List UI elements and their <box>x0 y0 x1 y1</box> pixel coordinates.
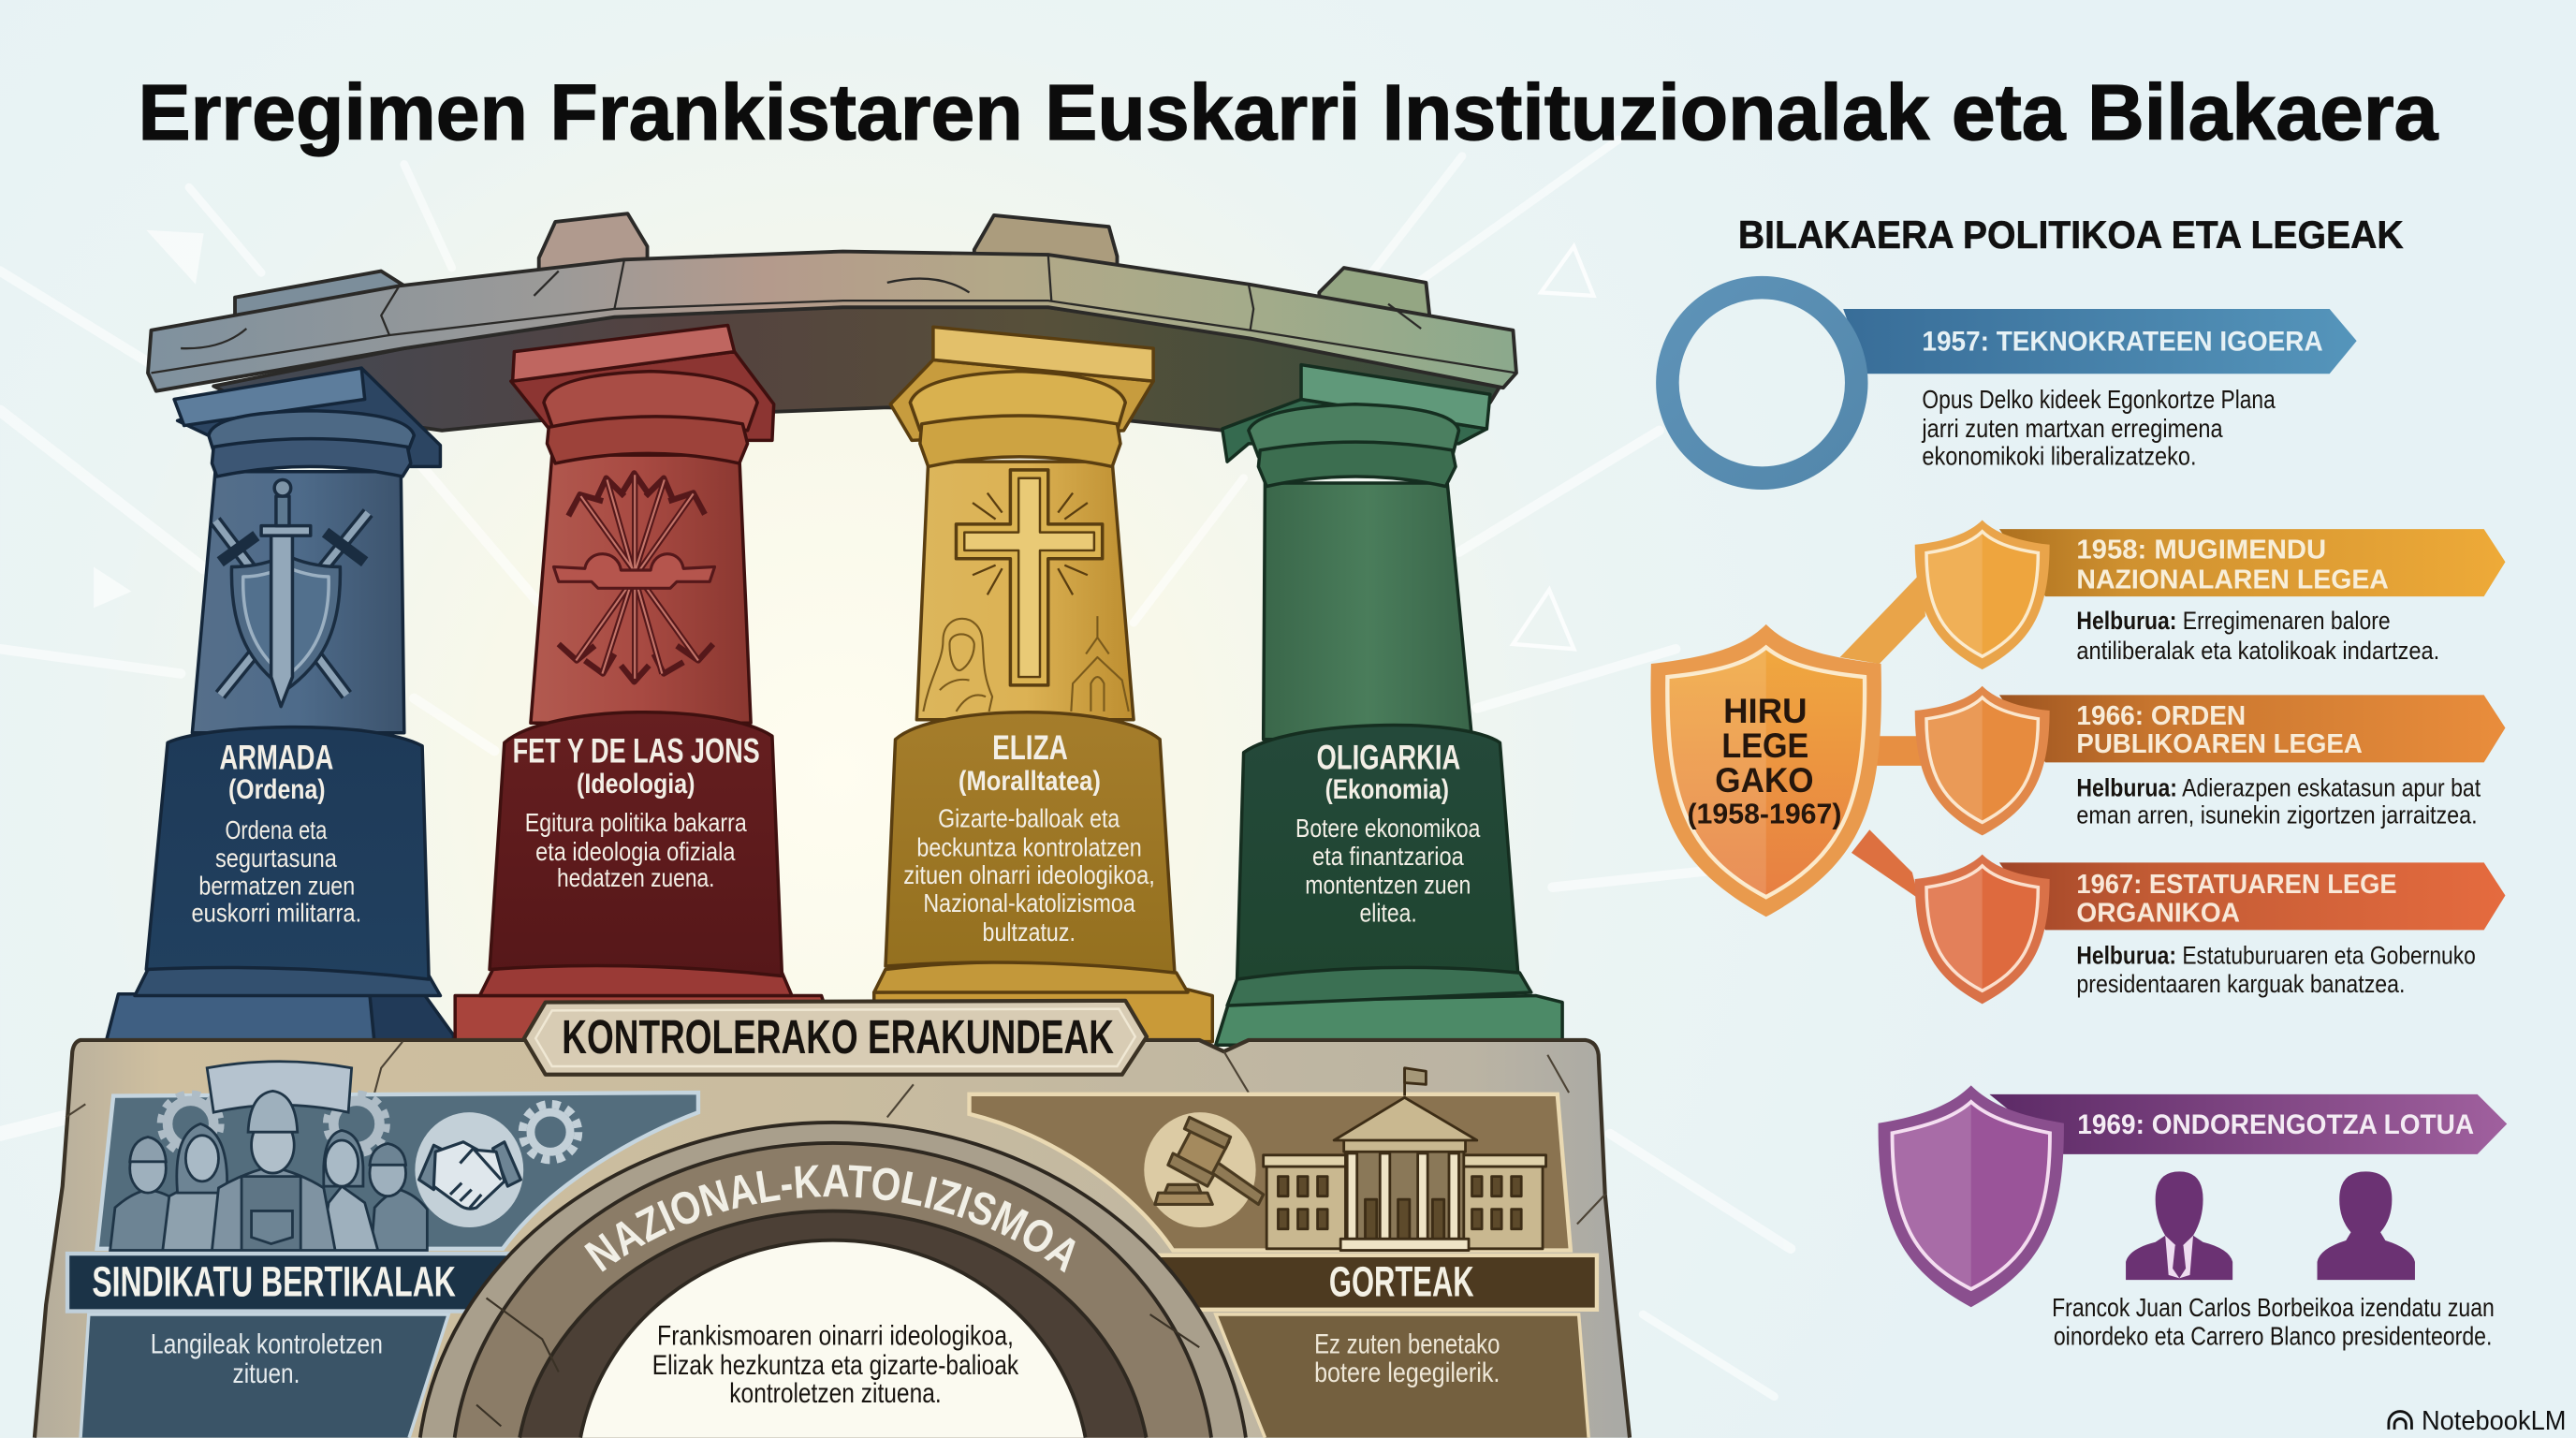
arch: NAZIONAL-KATOLIZISMOA <box>584 1165 1076 1273</box>
arch description: Elizak hezkuntza eta gizarte-balioak <box>652 1350 1018 1381</box>
icon: cross with rays <box>956 470 1103 685</box>
panel illustration background <box>970 1094 1571 1251</box>
arch description: Frankismoaren oinarri ideologikoa, <box>657 1320 1014 1351</box>
label: Oligarkia: eta finantzarioa <box>1312 842 1464 871</box>
label: Eliza: Nazional-katolizismoa <box>923 888 1135 917</box>
description <box>151 1328 383 1389</box>
law text 1966 <box>2076 772 2481 829</box>
icon: gears <box>161 1094 578 1160</box>
description: Ez zuten benetako <box>1314 1328 1500 1359</box>
label: Armada: segurtasuna <box>215 844 337 873</box>
icon: gavel <box>1144 1112 1264 1227</box>
heading 1957: 1957: TEKNOKRATEEN IGOERA <box>1922 327 2323 358</box>
right column heading: BILAKAERA POLITIKOA ETA LEGEAK <box>1738 213 2404 257</box>
label: Armada <box>192 738 361 928</box>
icon: person silhouette <box>2318 1171 2415 1280</box>
stone entablature <box>148 213 1516 431</box>
label: Eliza <box>903 728 1155 946</box>
beam top slab <box>148 252 1516 391</box>
label: Oligarkia: (Ekonomia) <box>1325 774 1449 805</box>
label: Oligarkia: montentzen zuen <box>1305 871 1471 900</box>
panel: Sindikatu Bertikalak <box>67 1062 698 1438</box>
law text 1967 <box>2076 940 2476 998</box>
description 1969 <box>2052 1293 2495 1350</box>
label: Oligarkia: Botere ekonomikoa <box>1295 814 1481 843</box>
law banner 1966 <box>1915 686 2505 835</box>
label: FET y de las JONS: Egitura politika bakarra <box>525 808 747 837</box>
arch stone rings <box>420 1123 1246 1438</box>
law banner 1958 <box>1915 520 2505 669</box>
law text 1966: Helburua: Adierazpen eskatasun apur bat <box>2076 772 2481 801</box>
label: FET y de las JONS: (Ideologia) <box>577 769 695 800</box>
heading: SINDIKATU BERTIKALAK <box>92 1258 456 1306</box>
law banner 1967: 1967: ESTATUAREN LEGE <box>2076 870 2397 900</box>
icon: handshake <box>415 1112 523 1227</box>
description 1957: Opus Delko kideek Egonkortze Plana <box>1922 385 2276 414</box>
law text 1958: Helburua: Erregimenaren balore <box>2076 606 2391 635</box>
podium stone <box>35 1040 1630 1438</box>
pillar: Armada <box>105 368 453 1045</box>
arch heading <box>509 1196 1157 1397</box>
label: Eliza: ELIZA <box>992 728 1068 767</box>
label: Eliza: Gizarte-balloak eta <box>938 804 1120 833</box>
arch <box>417 1121 1248 1438</box>
title: Erregimen Frankistaren Euskarri Instituzionalak eta Bilakaera <box>138 68 2439 156</box>
label: Eliza: beckuntza kontrolatzen <box>916 832 1142 861</box>
label: Oligarkia: elitea. <box>1360 899 1417 928</box>
icon: church <box>1071 616 1129 712</box>
main shield <box>1651 624 1881 917</box>
label: Eliza: (Moralltatea) <box>959 766 1101 797</box>
arch description: kontroletzen zituena. <box>729 1378 942 1409</box>
law banner 1966: 1966: ORDEN <box>2076 701 2246 731</box>
label: FET y de las JONS: eta ideologia ofiziala <box>535 837 736 866</box>
description: zituen. <box>233 1358 300 1389</box>
icon: purple shield <box>1879 1085 2064 1307</box>
icon: praying figure <box>923 619 992 712</box>
pillar: Eliza <box>874 327 1212 1042</box>
banner: Kontrolerako Erakundeak: KONTROLERAKO ERAKUNDEAK <box>562 1010 1114 1064</box>
NotebookLM logo: NotebookLM <box>2422 1406 2566 1436</box>
label: Armada: bermatzen zuen <box>198 872 355 901</box>
label: Armada: (Ordena) <box>228 774 326 805</box>
arch description <box>652 1320 1018 1409</box>
law text 1958: antiliberalak eta katolikoak indartzea. <box>2076 636 2439 665</box>
label: FET y de las JONS: hedatzen zuena. <box>557 863 714 892</box>
label: Eliza: bultzatuz. <box>983 917 1076 946</box>
law text 1966: eman arren, isunekin zigortzen jarraitzea. <box>2076 800 2478 829</box>
label: FET y de las JONS: FET Y DE LAS JONS <box>513 731 760 770</box>
panel: Gorteak <box>970 1068 1597 1438</box>
column stone <box>105 368 453 1045</box>
heading 1969: 1969: ONDORENGOTZA LOTUA <box>2077 1109 2474 1140</box>
description 1957: jarri zuten martxan erregimena <box>1922 414 2223 443</box>
title bar: Sindikatu Bertikalak <box>67 1254 524 1312</box>
main shield: GAKO <box>1715 761 1814 800</box>
panel illustration background <box>97 1093 698 1249</box>
description 1957: ekonomikoki liberalizatzeko. <box>1922 442 2197 471</box>
label: Armada: euskorri militarra. <box>192 899 361 928</box>
label: FET y de las JONS <box>513 731 760 892</box>
description <box>1314 1328 1500 1388</box>
lower panel <box>1216 1314 1588 1438</box>
law banner 1958: NAZIONALAREN LEGEA <box>2076 565 2389 594</box>
timeline 1969 <box>1879 1085 2507 1350</box>
law text 1967: presidentaaren karguak banatzea. <box>2076 969 2405 998</box>
main shield: LEGE <box>1721 726 1808 765</box>
timeline 1957 <box>1667 287 2357 478</box>
law text 1958 <box>2076 606 2439 665</box>
law text 1967: Helburua: Estatuburuaren eta Gobernuko <box>2076 940 2476 969</box>
pillar: Oligarkia <box>1216 365 1562 1045</box>
law banner 1967: ORGANIKOA <box>2076 899 2240 929</box>
icon: parliament building <box>1264 1068 1546 1251</box>
arrow banner 1969 <box>1989 1094 2507 1154</box>
label: Eliza: zituen olnarri ideologikoa, <box>903 860 1155 889</box>
description 1957 <box>1922 385 2276 471</box>
main shield: (1958-1967) <box>1687 797 1841 829</box>
podium <box>35 1040 1630 1438</box>
label: Oligarkia <box>1295 738 1481 928</box>
description: botere legegilerik. <box>1314 1357 1500 1388</box>
law banner 1967 <box>1915 855 2505 1004</box>
column stone <box>455 325 838 1045</box>
connectors <box>1840 572 1925 899</box>
icon: yoke and arrows <box>554 473 714 682</box>
law banner 1958: 1958: MUGIMENDU <box>2076 536 2326 565</box>
column stone <box>1216 365 1562 1045</box>
pillar: FET y de las JONS <box>455 325 838 1045</box>
icon: workers group <box>110 1091 427 1251</box>
three key laws group <box>1651 520 2505 1004</box>
label: Armada: Ordena eta <box>225 815 328 844</box>
label: Oligarkia: OLIGARKIA <box>1317 738 1460 776</box>
description 1969: Francok Juan Carlos Borbeikoa izendatu zuan <box>2052 1293 2495 1322</box>
lower panel <box>80 1314 448 1438</box>
capstone blocks <box>235 213 1431 329</box>
banner: Kontrolerako Erakundeak <box>524 1001 1147 1075</box>
icon: sword and shield <box>215 479 368 707</box>
law banner 1966: PUBLIKOAREN LEGEA <box>2076 729 2363 759</box>
description: Langileak kontroletzen <box>151 1328 383 1359</box>
underside of the beam <box>213 307 1503 431</box>
column stone <box>874 327 1212 1042</box>
icon: ring <box>1667 287 1856 478</box>
description 1969: oinordeko eta Carrero Blanco presidenteorde. <box>2054 1321 2492 1350</box>
icon: protest sign <box>207 1062 352 1112</box>
arrow banner 1957 <box>1843 309 2357 374</box>
label: Armada: ARMADA <box>219 738 333 776</box>
heading: GORTEAK <box>1329 1258 1474 1306</box>
icon: person in suit <box>2126 1171 2232 1280</box>
title bar: Gorteak <box>1147 1255 1597 1310</box>
main shield: HIRU <box>1723 692 1808 730</box>
